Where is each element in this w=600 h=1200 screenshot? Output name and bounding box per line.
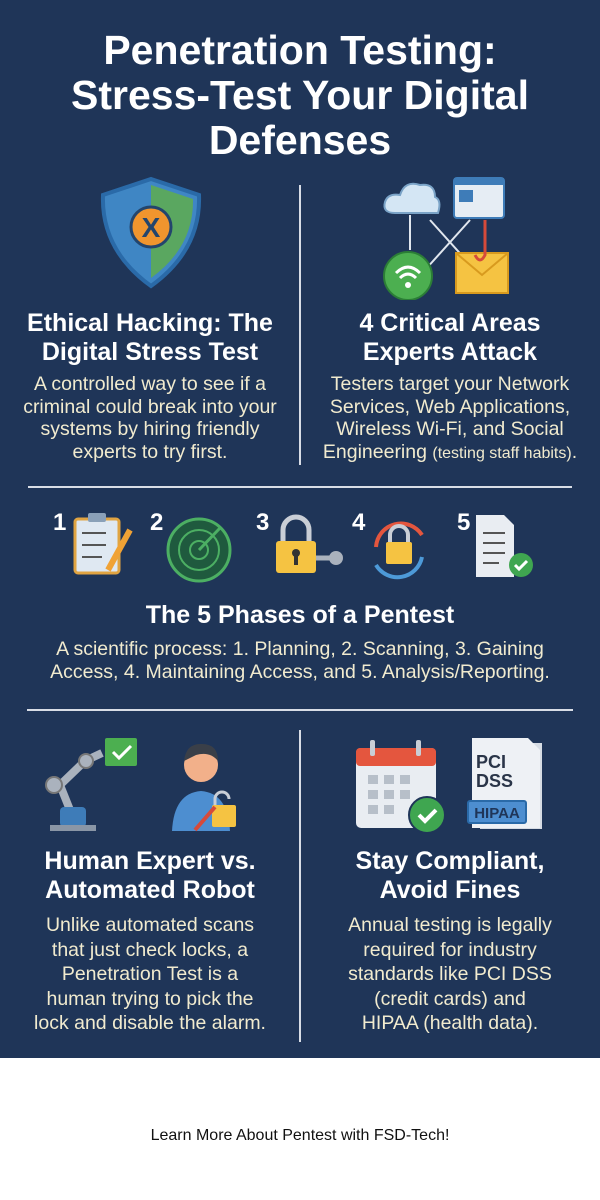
text: critical areas: Wireless Wi-Fi, and Social [336, 418, 564, 440]
text: compliance: Annual testing is legally [348, 914, 552, 936]
text: compliance: HIPAA (health data). [362, 1012, 538, 1034]
phase icons row: 5 [457, 509, 470, 536]
heading: critical areas: 4 Critical Areas [359, 309, 541, 337]
heading: human vs robot: Automated Robot [45, 876, 255, 904]
title: Stress-Test Your Digital [71, 72, 529, 118]
heading: critical areas [359, 309, 541, 366]
text: human vs robot: human trying to pick the [46, 988, 254, 1010]
heading: 5 phases: The 5 Phases of a Pentest [146, 601, 454, 629]
text: 5 phases: Access, 4. Maintaining Access, and 5. Analysis/Reporting. [50, 660, 550, 682]
text: ethical hacking [23, 373, 277, 462]
text: human vs robot [34, 914, 266, 1034]
text: critical areas: Engineering (testing staff habits). [323, 440, 577, 462]
icon: calendar and compliance docs [356, 738, 542, 832]
title: Defenses [209, 117, 391, 163]
icon: calendar and compliance docs: HIPAA [474, 805, 520, 822]
text: human vs robot: Penetration Test is a [62, 963, 238, 985]
footer: Learn More About Pentest with FSD-Tech! [151, 1127, 449, 1144]
icon: calendar and compliance docs: PCI [476, 752, 506, 772]
text: ethical hacking: experts to try first. [73, 440, 227, 462]
title: Penetration Testing: [103, 27, 497, 73]
heading: ethical hacking: Digital Stress Test [42, 338, 258, 366]
text: critical areas: Services, Web Applications, [330, 396, 570, 418]
icon: robot and human [45, 738, 236, 832]
text: 5 phases [50, 638, 550, 682]
heading: compliance: Avoid Fines [380, 876, 520, 904]
text: ethical hacking: systems by hiring friendly [41, 418, 259, 440]
text: compliance: (credit cards) and [374, 988, 526, 1010]
heading: ethical hacking [27, 309, 273, 366]
icon: network areas [383, 177, 509, 300]
heading: compliance: Stay Compliant, [356, 847, 544, 875]
phase icons row [53, 509, 533, 582]
phase icons row: 2 [150, 509, 163, 536]
text: critical areas [323, 373, 577, 462]
icon: shield: X [142, 212, 161, 243]
phase icons row: 3 [256, 509, 269, 536]
heading: critical areas: Experts Attack [363, 338, 537, 366]
phase icons row: 4 [352, 509, 366, 536]
icon: calendar and compliance docs: DSS [476, 771, 513, 791]
icon: shield [100, 177, 202, 288]
text: human vs robot: lock and disable the alarm. [34, 1012, 266, 1034]
title [71, 27, 529, 163]
text: compliance [348, 914, 552, 1034]
text: human vs robot: that just check locks, a [52, 938, 248, 960]
text: ethical hacking: A controlled way to see if a [34, 373, 266, 395]
text: critical areas: Testers target your Network [331, 373, 569, 395]
heading: compliance [356, 847, 544, 904]
phase icons row: 1 [53, 509, 66, 536]
heading: human vs robot: Human Expert vs. [44, 847, 256, 875]
text: human vs robot: Unlike automated scans [46, 914, 254, 936]
text: ethical hacking: criminal could break into your [23, 396, 277, 418]
text: 5 phases: A scientific process: 1. Planning, 2. Scanning, 3. Gaining [56, 638, 544, 660]
text: compliance: required for industry [363, 938, 537, 960]
heading: ethical hacking: Ethical Hacking: The [27, 309, 273, 337]
heading: human vs robot [44, 847, 256, 904]
text: compliance: standards like PCI DSS [348, 963, 552, 985]
